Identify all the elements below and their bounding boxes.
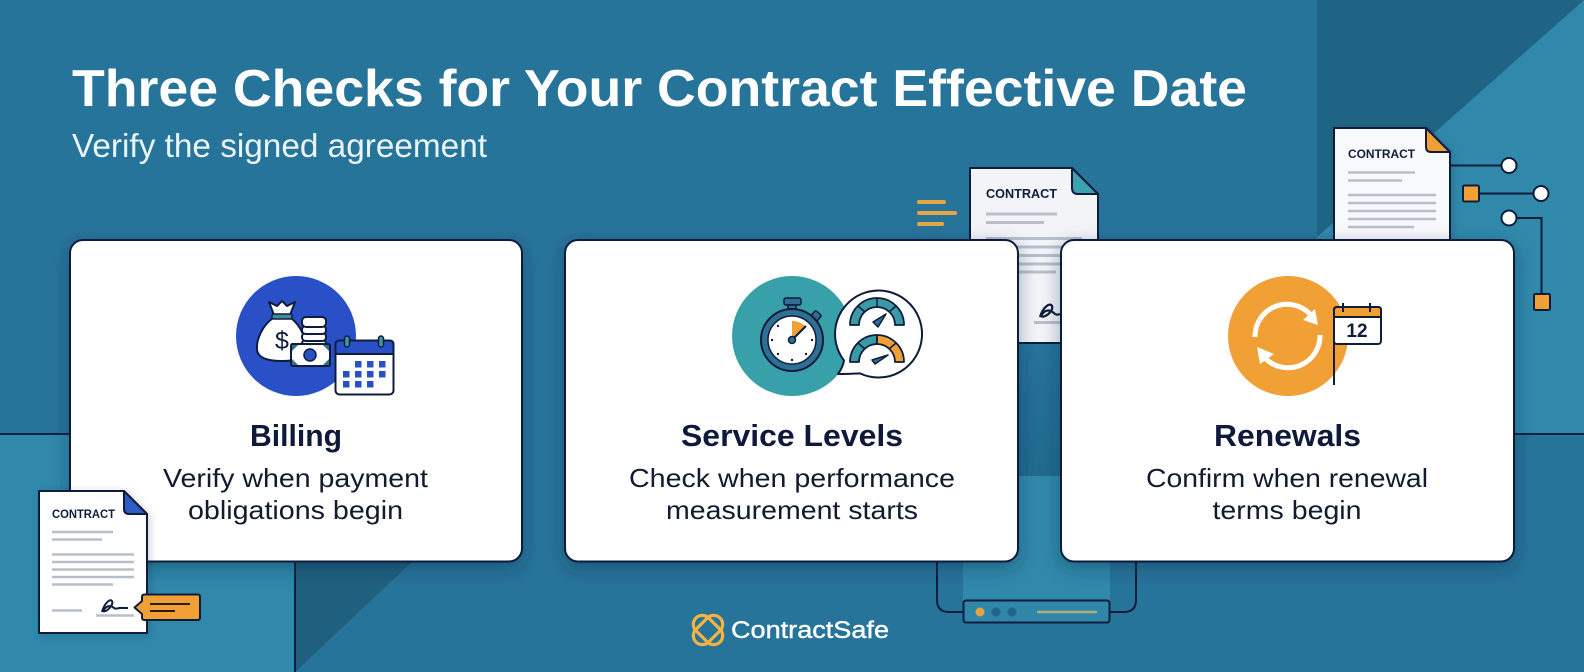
icon: money bag, cash and calendar xyxy=(236,276,394,396)
decorative contract document, top right: CONTRACT xyxy=(1348,147,1416,161)
title: Three Checks for Your Contract Effective Date xyxy=(72,60,1247,118)
decorative contract document, bottom left xyxy=(39,491,200,633)
card: Billing xyxy=(70,240,522,562)
body: Service Levels: measurement starts xyxy=(666,495,918,525)
heading: Service Levels: Service Levels xyxy=(681,418,903,453)
icon: stopwatch and gauges xyxy=(732,276,922,396)
circuit connectors xyxy=(1450,158,1550,310)
orange motion lines xyxy=(919,202,955,224)
callout tag xyxy=(134,594,200,620)
device connector lines xyxy=(937,560,1136,612)
body: Billing: Verify when payment xyxy=(163,463,429,493)
decorative contract document, top right xyxy=(1334,128,1450,245)
body: Billing: obligations begin xyxy=(188,495,403,525)
icon: renewal arrows and calendar: 12 xyxy=(1346,321,1368,342)
body: Billing xyxy=(163,463,429,525)
icon: renewal arrows and calendar xyxy=(1228,276,1381,396)
card: Service Levels xyxy=(565,240,1018,562)
icon: money bag, cash and calendar: $ xyxy=(275,327,289,355)
body: Renewals: Confirm when renewal xyxy=(1146,463,1428,493)
decorative contract document, centre xyxy=(970,168,1098,343)
logo: ContractSafe xyxy=(690,612,889,648)
heading: Billing: Billing xyxy=(250,418,342,453)
body: Renewals: terms begin xyxy=(1212,495,1362,525)
logo mark xyxy=(690,612,726,648)
body: Service Levels xyxy=(629,463,955,525)
status device bar xyxy=(964,600,1110,622)
heading: Renewals: Renewals xyxy=(1214,418,1361,453)
decorative contract document, bottom left: CONTRACT xyxy=(52,509,115,521)
logo: ContractSafe: ContractSafe xyxy=(731,617,889,644)
card: Renewals xyxy=(1061,240,1514,562)
subtitle: Verify the signed agreement xyxy=(72,127,487,164)
body: Renewals xyxy=(1146,463,1428,525)
body: Service Levels: Check when performance xyxy=(629,463,955,493)
decorative contract document, centre: CONTRACT xyxy=(986,186,1057,201)
